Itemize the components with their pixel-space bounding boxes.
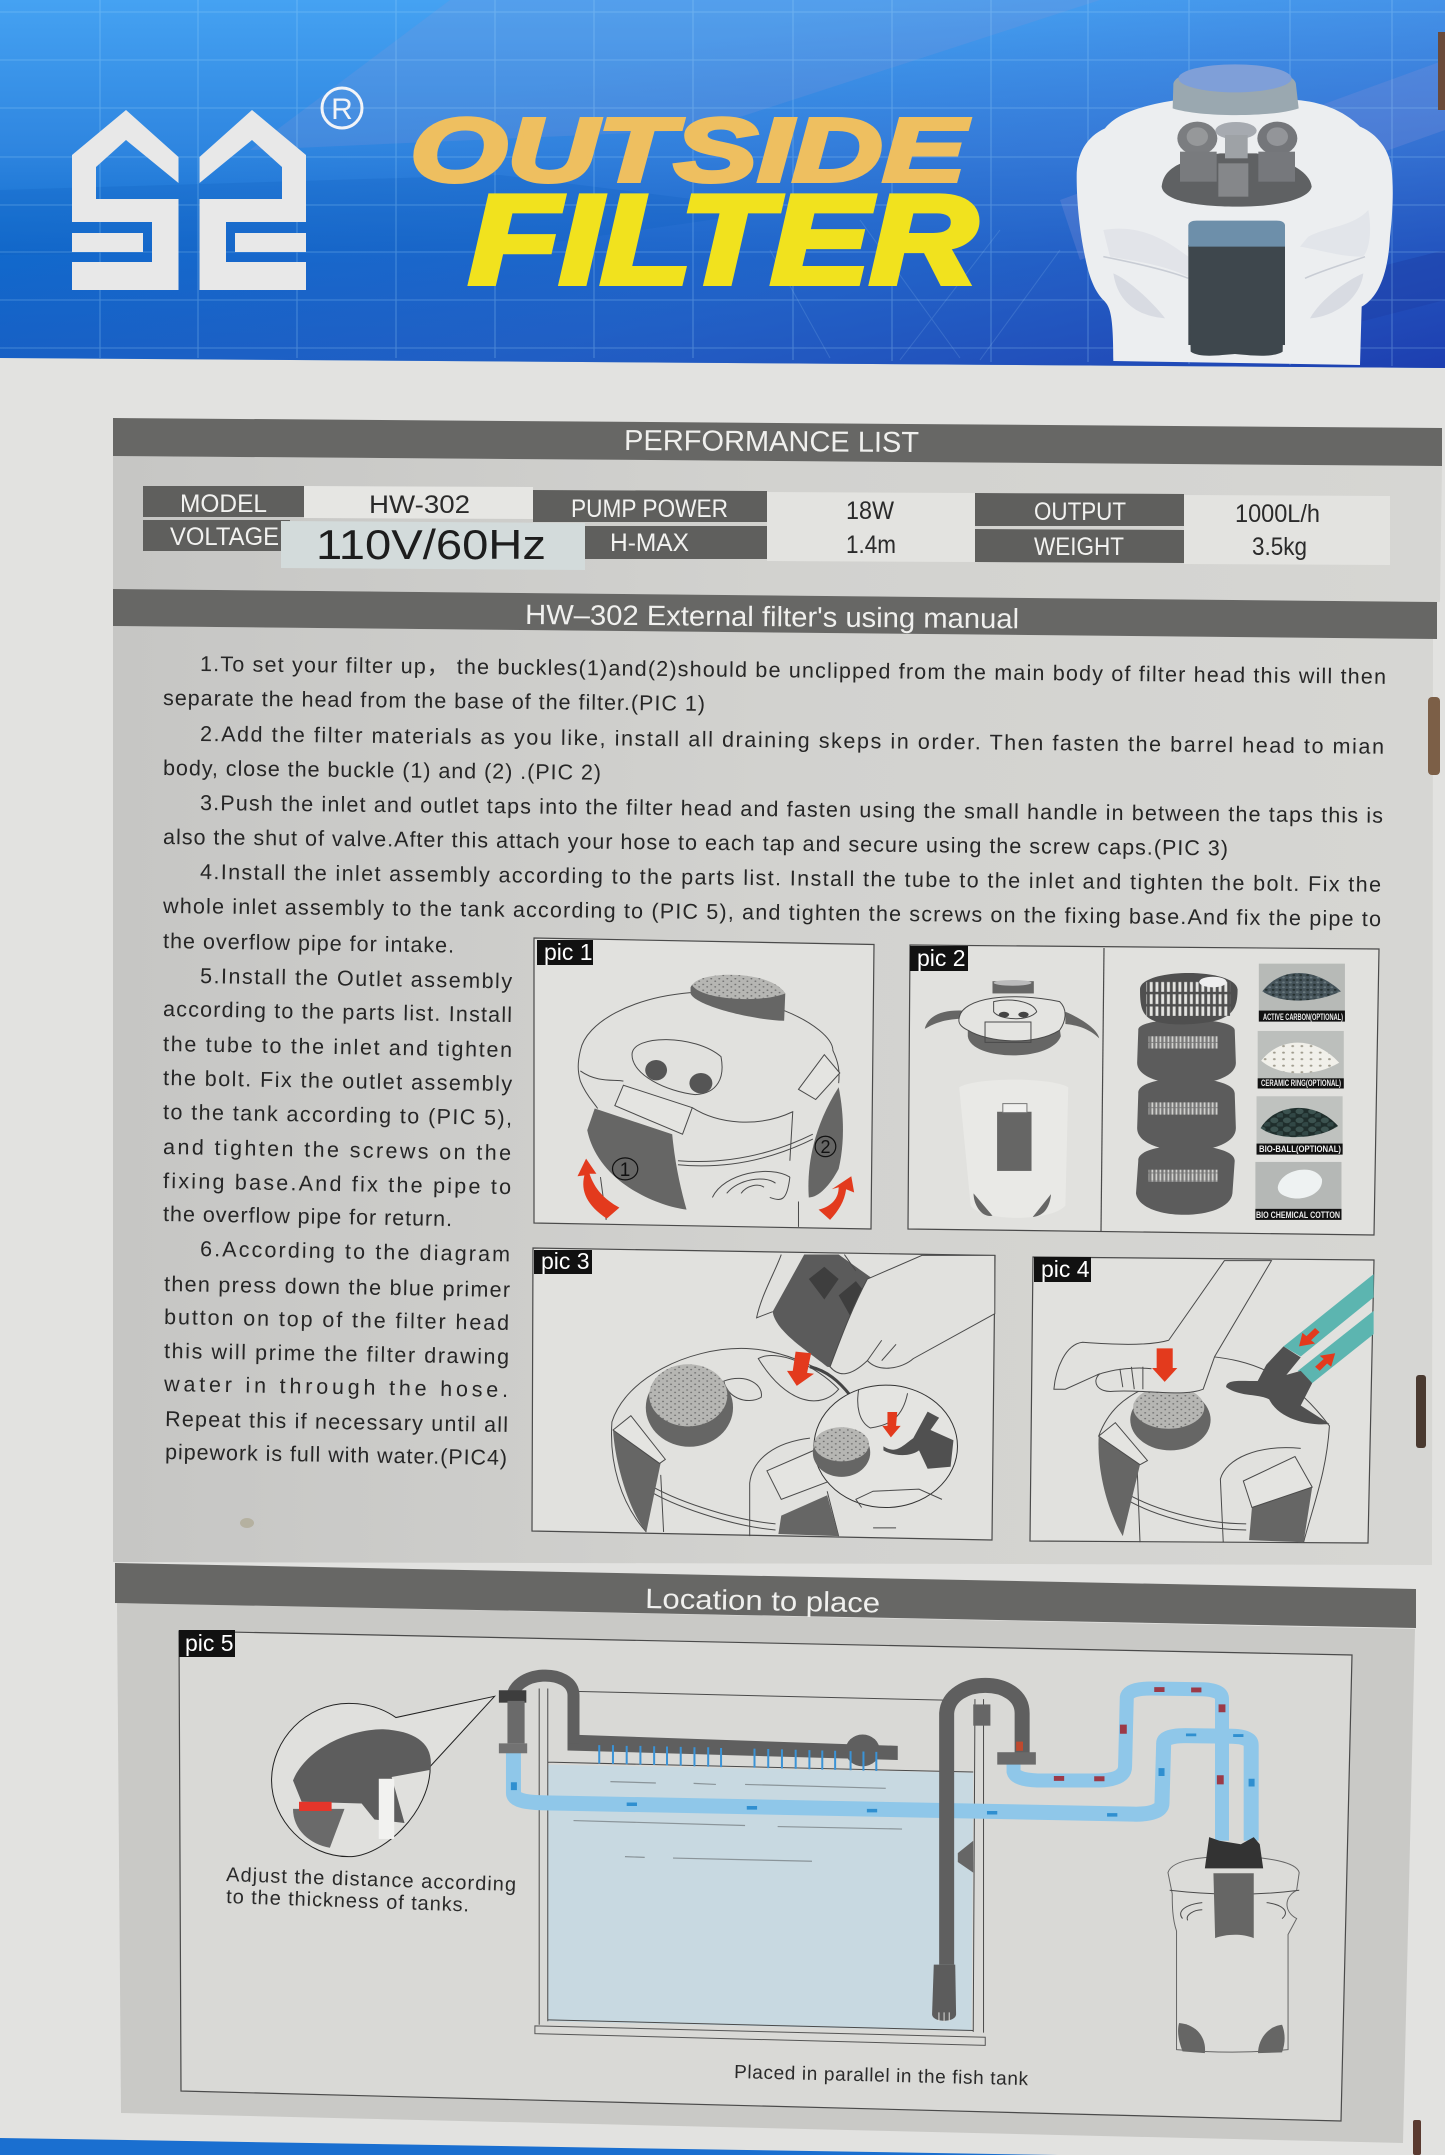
pic 1 tag: pic 1 (544, 939, 593, 965)
arrow: right red (819, 1176, 854, 1220)
performance table (143, 486, 1390, 570)
title: FILTER: FILTER (469, 169, 977, 310)
table: pump power value: 18W (846, 497, 894, 525)
external canister filter (1168, 1837, 1299, 2053)
stain marks (240, 1518, 254, 1528)
manual instructions text: the overflow pipe for intake. (163, 929, 454, 958)
manual instructions text: then press down the blue primer (164, 1272, 510, 1302)
note: placed in parallel: Placed in parallel in the fish tank (734, 2062, 1029, 2090)
note: adjust distance: Adjust the distance according (226, 1864, 516, 1896)
manual instructions text (162, 652, 1386, 1470)
header banner (0, 0, 1445, 368)
manual instructions text: pipework is full with water.(PIC4) (165, 1440, 507, 1470)
registered mark (322, 88, 362, 128)
manual instructions text: Repeat this if necessary until all (165, 1407, 508, 1437)
panel: manual background (113, 626, 1433, 1565)
buckle 1 (587, 1108, 687, 1210)
media: active carbon (1259, 964, 1345, 1022)
table: output value: 1000L/h (1235, 500, 1320, 528)
media caption: biochemical cotton: BIO CHEMICAL COTTON (1256, 1210, 1340, 1220)
manual instructions text: and tighten the screws on the (163, 1135, 511, 1165)
panel: pic 2 (908, 945, 1379, 1235)
note: adjust distance (226, 1864, 516, 1916)
manual instructions text: button on top of the filter head (164, 1305, 509, 1335)
table: model: MODEL (180, 490, 267, 518)
heading bar: performance list: PERFORMANCE LIST (624, 425, 919, 459)
buckle number 2: 2 (820, 1137, 831, 1157)
heading bar: using manual (113, 589, 1437, 639)
buckle number 1: 1 (620, 1160, 630, 1181)
icon: primer button (646, 1364, 733, 1447)
manual instructions text: 5.Install the Outlet assembly (200, 964, 513, 993)
manual instructions text: to the tank according to (PIC 5), (163, 1100, 512, 1130)
table: weight: WEIGHT (1034, 533, 1124, 561)
metal staples (1413, 697, 1440, 2155)
icon: filter head exploded (925, 980, 1099, 1055)
buckle (613, 1430, 661, 1532)
buckle (1098, 1436, 1140, 1536)
voltage sticker (281, 521, 585, 570)
fish tank (535, 1688, 985, 2045)
icon: tap knobs (645, 1060, 712, 1093)
icon: filter canister (959, 1080, 1068, 1218)
arrow: press primer (1152, 1348, 1177, 1382)
panel: pic 1 (534, 938, 874, 1229)
blue intake pipe (513, 1736, 1251, 1841)
media: biochemical cotton (1255, 1162, 1341, 1220)
registered mark: R (331, 93, 353, 126)
media: bio-ball (1257, 1096, 1343, 1155)
pic 3 tag: pic 3 (541, 1248, 590, 1274)
front panel (1188, 221, 1285, 356)
manual instructions text: also the shut of valve.After this attach your hose to each tap and secure using the screw caps.(PIC 3) (163, 825, 1228, 861)
media: ceramic ring (1258, 1031, 1344, 1089)
table: pump power: PUMP POWER (571, 495, 728, 523)
hand on primer (1054, 1261, 1271, 1393)
bottom blue strip (0, 2138, 1058, 2155)
manual instructions text: body, close the buckle (1) and (2) .(PIC 2) (163, 756, 601, 785)
tap base and connectors (1162, 122, 1312, 207)
panel: pic 3 (532, 1248, 995, 1540)
manual instructions text: fixing base.And fix the pipe to (163, 1169, 511, 1199)
manual instructions text: the bolt. Fix the outlet assembly (163, 1066, 513, 1096)
pic 5 tag: pic 5 (185, 1630, 234, 1656)
manual instructions text: 3.Push the inlet and outlet taps into the filter head and fasten using the small handle in between the taps this is (200, 791, 1383, 828)
flow markers (511, 1687, 1255, 1817)
heading bar: performance list (113, 418, 1442, 466)
panel: location background (117, 1603, 1415, 2143)
inset: tap detail (813, 1385, 957, 1528)
heading bar: using manual: HW–302 External filter's using manual (525, 599, 1019, 634)
arrow: left red (577, 1159, 619, 1219)
heading bar: location to place (115, 1563, 1416, 1628)
manual instructions text: this will prime the filter drawing (164, 1339, 509, 1369)
media caption: active carbon: ACTIVE CARBON(OPTIONAL) (1263, 1012, 1343, 1022)
outlet tube and strainer (932, 1685, 1036, 2022)
blue return pipe (1014, 1688, 1222, 1841)
panel: performance list background (113, 456, 1442, 602)
product photo: filter head (1077, 64, 1393, 365)
manual instructions text: 1.To set your filter up， the buckles(1)and(2)should be unclipped from the main body of filter head this will then (200, 652, 1386, 689)
manual instructions text: 4.Install the inlet assembly according to the parts list. Install the tube to the inlet and tighten the bolt. Fix the (200, 860, 1381, 897)
heading bar: location to place: Location to place (645, 1583, 880, 1619)
table: voltage: VOLTAGE (170, 523, 279, 551)
title: OUTSIDE: OUTSIDE (410, 101, 970, 201)
table: output: OUTPUT (1034, 498, 1126, 526)
note: adjust distance: to the thickness of tanks. (226, 1886, 469, 1916)
manual instructions text: according to the parts list. Install (163, 997, 512, 1027)
tap fittings (1226, 1346, 1329, 1424)
panel: pic 5 (179, 1630, 1352, 2121)
table: h-max: H-MAX (610, 529, 689, 557)
manual instructions text: 6.According to the diagram (200, 1237, 510, 1266)
panel: pic 4 (1030, 1256, 1374, 1543)
logo (72, 110, 306, 290)
table: model value: HW-302 (369, 491, 470, 519)
staple top right (1438, 32, 1445, 110)
arrow: press down (787, 1352, 814, 1386)
buckle 2 (808, 1087, 843, 1197)
manual instructions text: the tube to the inlet and tighten (163, 1032, 512, 1062)
manual instructions text: the overflow pipe for return. (163, 1202, 452, 1231)
icon: primer button (1130, 1386, 1211, 1450)
pic 2 tag: pic 2 (917, 945, 966, 971)
hoses (1284, 1274, 1374, 1383)
icon: media trays stack (1136, 973, 1238, 1215)
spray bar with outlets (499, 1676, 898, 1771)
manual instructions text: 2.Add the filter materials as you like, install all draining skeps in order. Then fasten the barrel head to mian (200, 722, 1384, 759)
cap ring (1173, 64, 1299, 115)
media caption: ceramic ring: CERAMIC RING(OPTIONAL) (1261, 1078, 1341, 1088)
voltage sticker: 110V/60Hz (316, 521, 546, 568)
table: h-max value: 1.4m (846, 531, 896, 559)
inset: tank thickness detail (272, 1696, 495, 1857)
hand and tap block (757, 1255, 995, 1395)
table: weight value: 3.5kg (1252, 533, 1307, 561)
manual instructions text: water in through the hose. (163, 1372, 508, 1402)
manual instructions text: separate the head from the base of the filter.(PIC 1) (163, 686, 705, 716)
icon: primer button (691, 975, 785, 1021)
pic 4 tag: pic 4 (1041, 1256, 1090, 1282)
media caption: bio-ball: BIO-BALL(OPTIONAL) (1259, 1144, 1341, 1154)
manual instructions text: whole inlet assembly to the tank according to (PIC 5), and tighten the screws on the fixing base.And fix the pipe to (162, 894, 1381, 931)
